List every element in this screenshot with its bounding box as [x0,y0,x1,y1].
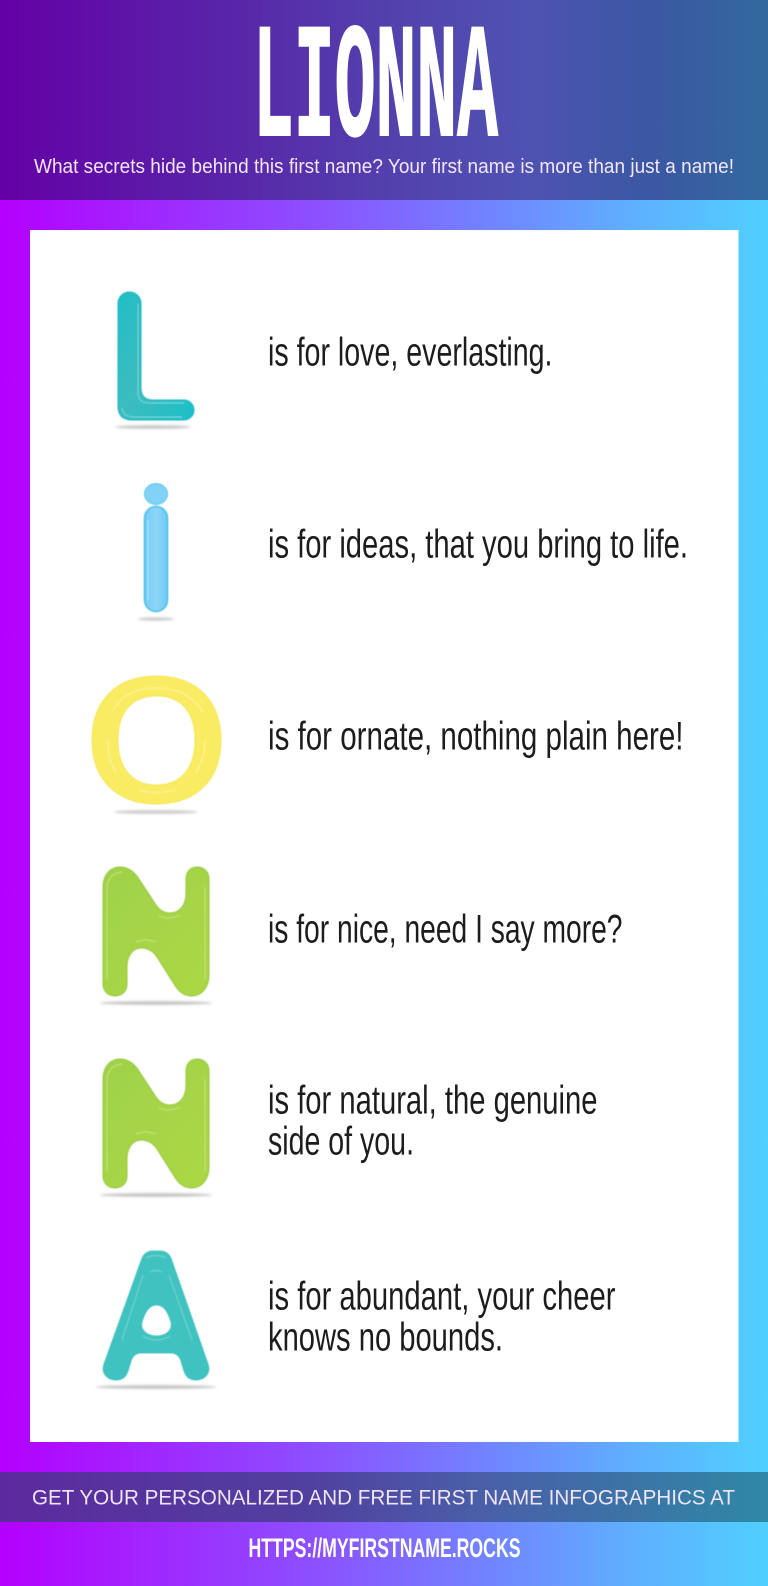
text: A lines: is for abundant, your cheer [268,1274,616,1318]
text: second N lines: is for natural, the genuine [268,1078,598,1122]
icon: letter L [115,292,194,429]
icon: letter i [138,484,174,620]
header band [0,0,768,200]
footer text: GET YOUR PERSONALIZED AND FREE FIRST NAME INFOGRAPHICS AT [32,1486,735,1510]
icon: second letter N [100,1059,212,1197]
white content panel [30,230,738,1442]
text: A lines [268,1274,616,1360]
subtitle: What secrets hide behind this first name? Your first name is more than just a name! [34,155,734,178]
text: second N lines [268,1078,598,1164]
row: letter I [138,484,688,620]
text: A lines: knows no bounds. [268,1316,503,1360]
icon: letter A [96,1251,216,1389]
row: letter O [92,676,684,814]
text: N line: is for nice, need I say more? [268,908,622,952]
icon: letter N [100,867,212,1005]
row: letter A [96,1251,616,1389]
text: L line: is for love, everlasting. [268,330,552,374]
row: letter L [115,292,552,429]
footer url: HTTPS://MYFIRSTNAME.ROCKS [248,1533,520,1563]
text: second N lines: side of you. [268,1120,414,1164]
row: letter N [100,867,622,1005]
row: second letter N [100,1059,598,1197]
icon: letter O [92,676,221,814]
footer band [0,1472,768,1522]
